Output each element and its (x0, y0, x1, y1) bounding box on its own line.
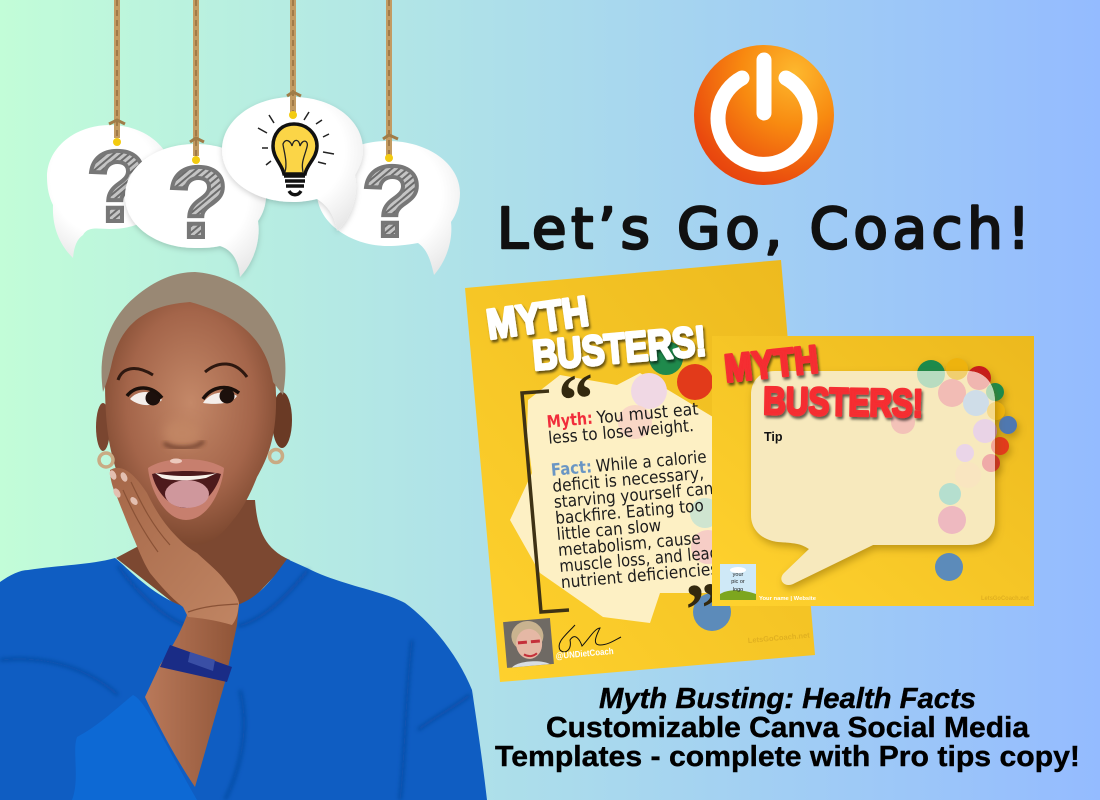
ear right (272, 392, 292, 448)
myth busters heading: BUSTERS! (763, 380, 924, 426)
watermark: LetsGoCoach.net (747, 631, 811, 645)
forearm (145, 603, 239, 787)
decorative circles (618, 341, 731, 631)
myth busters heading: BUSTERS! (531, 317, 708, 379)
bubble 4 with question mark: ? (361, 146, 423, 258)
caption: Myth Busting: Health Facts (599, 683, 976, 715)
template card: myth example (465, 260, 815, 682)
caption: Customizable Canva Social Media (546, 712, 1030, 744)
logo placeholder: logo (733, 587, 743, 593)
mouth (148, 458, 224, 520)
myth and fact copy: deficit is necessary, (552, 464, 705, 497)
bubble 3 with light bulb (222, 0, 363, 231)
decorative circles behind (917, 358, 1017, 472)
earrings (99, 450, 282, 467)
myth and fact copy (546, 399, 721, 593)
watch (160, 645, 232, 682)
name and website: Your name | Website (759, 596, 817, 602)
opening quote: “ (555, 358, 598, 441)
head (105, 300, 276, 545)
logo placeholder (720, 564, 756, 600)
bubble 2 with question mark: ? (167, 147, 229, 259)
sweater (0, 558, 487, 800)
myth and fact copy: little can slow (556, 516, 662, 545)
myth and fact copy: less to lose weight. (547, 416, 695, 449)
sweater folds and collar rib (0, 566, 470, 800)
eyebrows (118, 364, 247, 380)
hand on cheek (110, 468, 239, 625)
logo placeholder: your (733, 572, 744, 578)
tip label: Tip (764, 430, 783, 444)
myth and fact copy: You must eat (595, 399, 699, 428)
template card: tip blank (712, 336, 1034, 606)
icon: light bulb (258, 112, 334, 195)
myth and fact copy: Fact: (550, 457, 593, 481)
paint blob (510, 373, 730, 623)
bubble 1 with question mark (47, 0, 173, 258)
eye left (127, 388, 162, 406)
caption: Templates - complete with Pro tips copy! (495, 741, 1080, 773)
brand title: Let’s Go, Coach! (497, 197, 1030, 262)
sleeve cuff (72, 695, 197, 800)
myth and fact copy: nutrient deficiencies (560, 559, 719, 593)
closing quote: ” (682, 567, 725, 650)
signature (559, 625, 621, 652)
woman with surprised expression (0, 272, 487, 800)
finger lines and nails (108, 469, 238, 612)
caption (495, 683, 1080, 773)
eye right (203, 387, 239, 404)
social handle: @UNDietCoach (555, 646, 614, 661)
myth busters heading (722, 338, 924, 426)
bracket (522, 391, 569, 612)
myth and fact copy: Myth: (546, 409, 594, 433)
blue token (935, 553, 963, 581)
bubble 1 with question mark: ? (86, 131, 148, 243)
myth and fact copy: While a calorie (595, 447, 707, 477)
ear left (96, 403, 110, 451)
card background (465, 260, 815, 682)
watermark: LetsGoCoach.net (981, 596, 1029, 602)
myth busters heading (484, 287, 708, 379)
logo: power button (694, 45, 834, 185)
myth and fact copy: backfire. Eating too (554, 496, 705, 529)
speech bubble panel (751, 371, 995, 585)
hanging speech bubbles (47, 0, 460, 277)
neck (116, 500, 290, 612)
myth and fact copy: muscle loss, and lead (559, 543, 720, 577)
nose (164, 419, 204, 448)
pale circles seen through bubble (891, 371, 995, 534)
logo placeholder: pic or (731, 579, 745, 585)
myth and fact copy: metabolism, cause (557, 529, 701, 561)
bubble 2 with question mark (125, 0, 266, 277)
myth busters heading: MYTH (722, 338, 820, 391)
bubble 4 with question mark (317, 0, 460, 275)
card background (712, 336, 1034, 606)
myth busters heading: MYTH (484, 287, 591, 348)
myth and fact copy: starving yourself can (553, 479, 714, 513)
hair (102, 272, 285, 395)
author photo (503, 618, 554, 668)
